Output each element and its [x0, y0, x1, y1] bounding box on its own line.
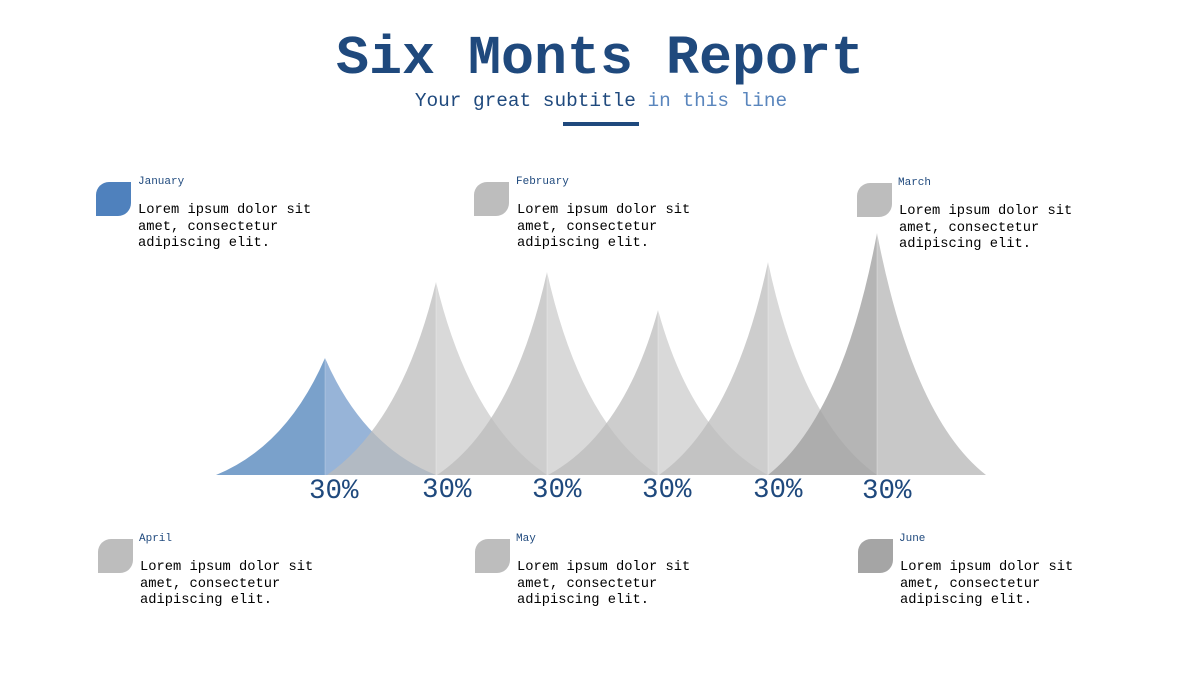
icon: May: [475, 539, 510, 573]
text: February: amet, consectetur: [517, 220, 657, 234]
icon: February: [474, 182, 509, 216]
text: February: [517, 203, 690, 251]
value: January: 30%: [309, 476, 359, 507]
icon: March: [857, 183, 892, 217]
text: May: Lorem ipsum dolor sit: [517, 560, 690, 575]
text: June: adipiscing elit.: [900, 593, 1032, 608]
text: March: amet, consectetur: [899, 220, 1039, 236]
text: January: adipiscing elit.: [138, 236, 270, 251]
peak: January: [216, 358, 436, 475]
label: June: June: [899, 533, 925, 545]
peak: February: [327, 282, 547, 475]
text: April: Lorem ipsum dolor sit: [140, 560, 313, 575]
label: April: April: [139, 533, 172, 545]
text: June: amet, consectetur: [900, 576, 1040, 592]
text: May: [517, 560, 690, 608]
value: April: 30%: [642, 475, 692, 506]
icon: April: [98, 539, 133, 573]
value: February: 30%: [422, 475, 472, 506]
text: May: amet, consectetur: [517, 576, 657, 592]
text: April: adipiscing elit.: [140, 593, 272, 608]
value: June: 30%: [862, 476, 912, 507]
subtitle: Your great subtitle in this line: [415, 90, 787, 112]
text: May: adipiscing elit.: [517, 593, 649, 608]
text: April: amet, consectetur: [140, 576, 280, 592]
label: March: March: [898, 177, 931, 189]
text: June: [900, 560, 1073, 608]
title: Six Monts Report: [336, 27, 864, 90]
peak: March: [437, 272, 658, 475]
text: June: Lorem ipsum dolor sit: [900, 560, 1073, 575]
text: January: amet, consectetur: [138, 220, 278, 234]
value: May: 30%: [753, 475, 803, 506]
peak: June: [768, 233, 986, 475]
text: February: adipiscing elit.: [517, 236, 649, 251]
text: March: [899, 204, 1072, 252]
icon: June: [858, 539, 893, 573]
text: January: [138, 203, 311, 251]
peak: April: [548, 310, 768, 475]
label: January: January: [138, 176, 184, 188]
text: February: Lorem ipsum dolor sit: [517, 203, 690, 218]
icon: January: [96, 182, 131, 216]
peak: May: [659, 262, 877, 475]
text: March: adipiscing elit.: [899, 237, 1031, 252]
text: March: Lorem ipsum dolor sit: [899, 204, 1072, 219]
title underline: [563, 122, 639, 126]
value: March: 30%: [532, 475, 582, 506]
label: February: February: [516, 176, 569, 188]
text: January: Lorem ipsum dolor sit: [138, 203, 311, 218]
text: April: [140, 560, 313, 608]
label: May: May: [516, 533, 536, 545]
